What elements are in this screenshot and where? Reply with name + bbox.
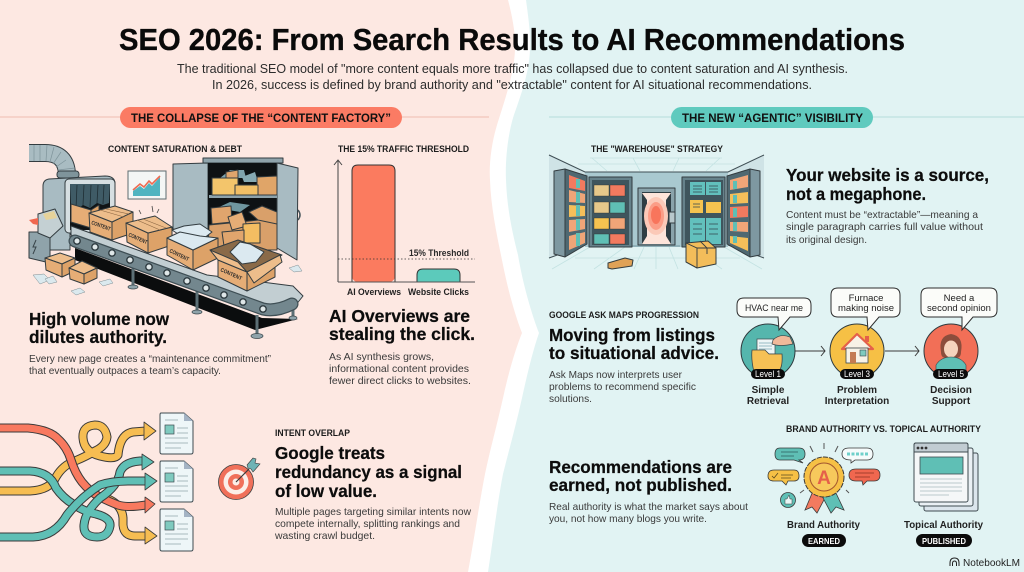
illustration: content factory conveyor: CONTENT [168, 248, 190, 263]
heading: warehouse: THE "WAREHOUSE" STRATEGY [591, 144, 723, 154]
section header: left: THE COLLAPSE OF THE “CONTENT FACTORY” [131, 111, 391, 125]
heading: high volume [29, 309, 169, 347]
boxes on belt [71, 204, 99, 228]
heading: ask maps: GOOGLE ASK MAPS PROGRESSION [549, 310, 699, 320]
bar chart: AI overviews vs website clicks: Website Clicks [408, 287, 469, 298]
motion marks [139, 206, 159, 214]
speech bubble [921, 288, 997, 330]
heading: redundancy: redundancy as a signal [275, 462, 462, 482]
wall chart [128, 171, 166, 199]
level 1: simple retrieval [737, 298, 811, 407]
heading: recommendations: Recommendations are [549, 457, 732, 477]
heading: recommendations: earned, not published. [549, 475, 732, 495]
progression arrows [795, 346, 919, 356]
icon: brand authority badge: A [817, 468, 831, 489]
speech bubble: making noise [838, 303, 894, 314]
body: recommendations: Real authority is what the market says about [549, 501, 748, 513]
speech bubble: Need a [944, 293, 975, 304]
body: high volume: Every new page creates a “maintenance commitment” [29, 353, 271, 365]
control panel [29, 232, 50, 263]
body: ask maps: solutions. [549, 393, 592, 405]
heading: stealing the click: AI Overviews are [329, 306, 470, 326]
speech bubble: Furnace [849, 293, 883, 304]
heading: recommendations [549, 457, 732, 495]
icon: documents [160, 413, 193, 551]
body: redundancy: Multiple pages targeting similar intents now [275, 506, 471, 518]
background: left panel [0, 0, 522, 572]
heading: redundancy: Google treats [275, 443, 385, 463]
heading: redundancy [275, 443, 462, 501]
level 5: decision support [921, 288, 997, 407]
heading: situational advice: Moving from listings [549, 325, 715, 345]
section header: right: THE NEW “AGENTIC” VISIBILITY [682, 111, 863, 125]
body: redundancy: wasting crawl budget. [274, 530, 375, 542]
level 5: decision support: Decision [930, 385, 972, 396]
icon: topical authority windows [914, 443, 978, 511]
body: ask maps: Ask Maps now interprets user [549, 369, 682, 381]
panel: intent overlap [0, 413, 471, 551]
speech bubble: HVAC near me [745, 303, 803, 314]
warehouse boxes [608, 241, 716, 269]
body: redundancy [274, 506, 471, 542]
conveyor belt [71, 226, 303, 306]
illustration: content factory conveyor [29, 145, 303, 338]
level 5: decision support: Support [932, 396, 971, 407]
illustration: tangled arrows [0, 422, 157, 544]
bar chart: AI overviews vs website clicks: 15% Threshold [409, 248, 469, 259]
heading: source not megaphone: Your website is a source, [786, 165, 989, 185]
panel: 15% traffic threshold [329, 144, 475, 387]
glowing door [638, 188, 675, 245]
level 3: problem interpretation: Interpretation [825, 396, 889, 407]
icon: brand authority badge [768, 443, 880, 513]
label: topical authority published: PUBLISHED [922, 536, 966, 546]
body: source not megaphone: Content must be “extractable”—meaning a [786, 209, 978, 221]
body: ask maps [549, 369, 696, 405]
heading: source not megaphone: not a megaphone. [786, 184, 926, 204]
level 3: problem interpretation: Problem [837, 385, 877, 396]
level 1: simple retrieval: Simple [752, 385, 785, 396]
level 5: decision support: Level 5 [938, 369, 964, 379]
body: source not megaphone [786, 209, 983, 246]
heading: stealing the click [329, 306, 475, 344]
bar chart: AI overviews vs website clicks [334, 160, 475, 298]
panel: warehouse strategy [549, 144, 989, 269]
heading: situational advice [549, 325, 719, 363]
body: recommendations [549, 501, 748, 525]
intro text: In 2026, success is defined by brand authority and "extractable" content for AI situational recommendations. [212, 78, 812, 92]
left inner shelf [589, 177, 632, 247]
body: stealing the click: informational content provides [329, 363, 469, 375]
section header: left [0, 107, 489, 128]
intro text: The traditional SEO model of "more content equals more traffic" has collapsed due to content saturation and AI synthesis. [177, 62, 848, 76]
heading: redundancy: of low value. [275, 481, 377, 501]
footer: NotebookLM mark: NotebookLM [963, 557, 1020, 569]
level 1: simple retrieval: Retrieval [747, 396, 789, 407]
left wall shelf [554, 169, 587, 257]
body: recommendations: you, not how many blogs you write. [549, 513, 707, 525]
label: brand authority earned: Brand Authority [787, 520, 860, 531]
body: ask maps: problems to recommend specific [549, 381, 696, 393]
illustration: content factory conveyor: CONTENT [219, 267, 243, 282]
conveyor legs [133, 268, 293, 336]
label: brand authority earned [787, 520, 860, 547]
body: stealing the click: As AI synthesis grows, [329, 351, 434, 363]
label: topical authority published: Topical Authority [904, 520, 983, 531]
speech bubble: second opinion [927, 303, 991, 314]
label: topical authority published [904, 520, 983, 547]
section header: right [549, 107, 1024, 128]
right wall shelf [727, 169, 760, 257]
heading: content saturation: CONTENT SATURATION & DEBT [108, 144, 242, 154]
body: stealing the click [329, 351, 471, 387]
illustration: content factory conveyor: CONTENT [127, 232, 148, 246]
illustration: content factory conveyor: CONTENT [90, 220, 112, 233]
body: high volume [29, 353, 271, 377]
body: redundancy: compete internally, splitting rankings and [275, 518, 460, 530]
level 3: problem interpretation [825, 288, 900, 407]
illustration: warehouse [549, 155, 764, 269]
background: right panel [488, 0, 1024, 572]
body: high volume: that eventually outpaces a team’s capacity. [29, 365, 221, 377]
body: source not megaphone: single paragraph carries full value without [786, 221, 983, 233]
panel: google ask maps progression [549, 288, 997, 407]
heading: situational advice: to situational advice. [549, 343, 719, 363]
heading: stealing the click: stealing the click. [329, 324, 475, 344]
cabinet [173, 163, 208, 237]
panel: brand vs topical authority [549, 424, 983, 547]
label: brand authority earned: EARNED [808, 536, 840, 546]
level 3: problem interpretation: Level 3 [844, 369, 870, 379]
machine [43, 176, 115, 250]
bar chart: AI overviews vs website clicks: AI Overviews [347, 287, 401, 298]
conveyor shadow [75, 248, 298, 330]
title: SEO 2026: From Search Results to AI Recommendations [119, 22, 905, 57]
icon: target [218, 458, 260, 500]
intro text [177, 62, 848, 92]
right inner shelf [682, 177, 725, 247]
loose boxes and papers [33, 253, 302, 295]
heading: high volume: dilutes authority. [29, 327, 167, 347]
heading: intent overlap: INTENT OVERLAP [275, 428, 350, 438]
heading: threshold: THE 15% TRAFFIC THRESHOLD [338, 144, 469, 154]
body: source not megaphone: its original design. [786, 234, 867, 246]
speech bubble [831, 288, 900, 330]
heading: high volume: High volume now [29, 309, 169, 329]
body: stealing the click: fewer direct clicks to websites. [329, 375, 471, 387]
panel: content saturation and debt [29, 144, 303, 377]
heading: brand vs topical: BRAND AUTHORITY VS. TOPICAL AUTHORITY [786, 424, 981, 434]
heading: source not megaphone [786, 165, 989, 204]
level 1: simple retrieval: Level 1 [755, 369, 781, 379]
